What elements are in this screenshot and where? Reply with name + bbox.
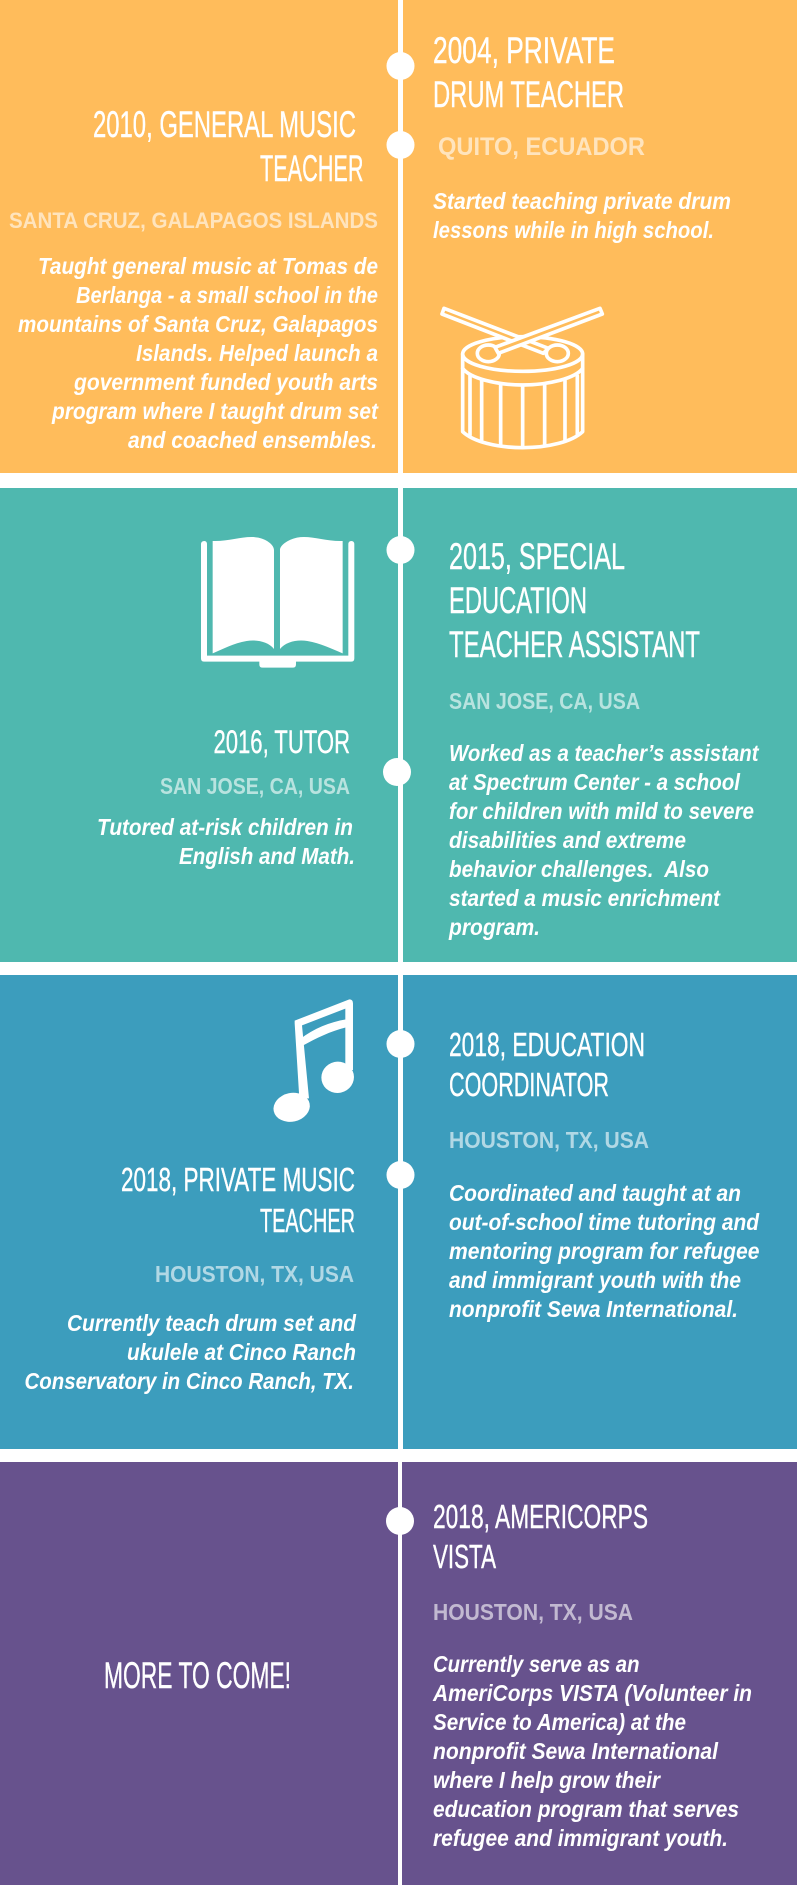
description: Tomas de Berlanga: [18, 253, 379, 453]
purple panel background: [0, 1462, 797, 1885]
timeline: vertical line with milestone dots: [383, 0, 414, 1885]
description: Spectrum Center: [448, 740, 760, 940]
teal panel background: [0, 488, 797, 962]
panel: 2004 and 2010 roles: [0, 0, 797, 473]
description: VISTA service: refugee and immigrant youth.: [433, 1825, 728, 1851]
description: VISTA service: Service to America) at the: [433, 1709, 686, 1735]
heading: 2010 general music teacher: [93, 104, 364, 189]
orange panel background: [0, 0, 797, 473]
description: Sewa International tutoring: mentoring program for refugee: [449, 1238, 760, 1264]
heading: 2004 private drum teacher: 2004, PRIVATE: [433, 30, 615, 71]
description: Sewa International tutoring: and immigrant youth with the: [449, 1267, 741, 1293]
panel: 2018 education coordinator and private music teacher: [0, 975, 797, 1449]
heading: 2010 general music teacher: 2010, GENERAL MUSIC: [93, 104, 356, 145]
description: tutoring: English and Math.: [179, 843, 355, 869]
icon: open book: [201, 537, 354, 668]
description: Spectrum Center: program.: [448, 914, 540, 940]
description: Sewa International tutoring: nonprofit Sewa International.: [449, 1296, 738, 1322]
description: VISTA service: [432, 1651, 752, 1851]
heading: 2018 AmeriCorps VISTA: 2018, AMERICORPS: [433, 1498, 648, 1535]
description: Cinco Ranch: Currently teach drum set and: [67, 1310, 357, 1336]
description: Sewa International tutoring: [449, 1180, 760, 1322]
heading: 2018 private music teacher: [121, 1161, 355, 1239]
blue panel background: [0, 975, 797, 1449]
panel: AmeriCorps VISTA and more to come: [0, 1462, 797, 1885]
description: tutoring: [97, 814, 355, 869]
location: Houston left: HOUSTON, TX, USA: [155, 1261, 354, 1287]
heading: 2010 general music teacher: TEACHER: [260, 148, 364, 189]
description: Spectrum Center: disabilities and extreme: [449, 827, 686, 853]
heading: 2018 AmeriCorps VISTA: [433, 1498, 648, 1575]
heading: 2015 special education teacher assistant: [449, 536, 700, 665]
description: Tomas de Berlanga: Islands. Helped launch a: [136, 340, 378, 366]
description: private drum lessons: Started teaching private drum: [433, 188, 731, 214]
heading: 2018 education coordinator: COORDINATOR: [449, 1066, 609, 1103]
description: private drum lessons: lessons while in high school.: [433, 217, 714, 243]
icon: drum with crossed sticks: [442, 308, 602, 448]
heading: 2018 education coordinator: 2018, EDUCATION: [449, 1026, 645, 1063]
description: VISTA service: Currently serve as an: [433, 1651, 640, 1677]
description: Spectrum Center: at Spectrum Center - a school: [449, 769, 741, 795]
heading: 2018 private music teacher: 2018, PRIVATE MUSIC: [121, 1161, 355, 1198]
description: VISTA service: where I help grow their: [433, 1767, 661, 1793]
heading: 2004 private drum teacher: [433, 30, 624, 115]
description: Cinco Ranch: Conservatory in Cinco Ranch, TX.: [24, 1368, 354, 1394]
description: Tomas de Berlanga: government funded youth arts: [73, 369, 378, 395]
description: Tomas de Berlanga: mountains of Santa Cruz, Galapagos: [18, 311, 378, 337]
description: Tomas de Berlanga: program where I taught drum set: [51, 398, 379, 424]
panel: 2015 and 2016 roles: [0, 488, 797, 962]
heading: 2015 special education teacher assistant: EDUCATION: [449, 580, 587, 621]
location: Houston purple: HOUSTON, TX, USA: [433, 1599, 633, 1625]
heading: 2018 AmeriCorps VISTA: VISTA: [433, 1538, 496, 1575]
description: Spectrum Center: started a music enrichment: [449, 885, 721, 911]
description: Tomas de Berlanga: Taught general music at Tomas de: [38, 253, 378, 279]
heading: 2018 education coordinator: [449, 1026, 645, 1103]
description: VISTA service: nonprofit Sewa International: [433, 1738, 719, 1764]
heading: 2018 private music teacher: TEACHER: [260, 1202, 355, 1239]
location: San Jose right: SAN JOSE, CA, USA: [449, 688, 640, 714]
icon: music notes: [271, 999, 357, 1125]
heading: 2015 special education teacher assistant: 2015, SPECIAL: [449, 536, 625, 577]
location: San Jose left: SAN JOSE, CA, USA: [160, 773, 350, 799]
description: Sewa International tutoring: Coordinated and taught at an: [449, 1180, 741, 1206]
heading: more to come: MORE TO COME!: [104, 1655, 291, 1696]
description: Spectrum Center: for children with mild to severe: [449, 798, 754, 824]
description: VISTA service: education program that serves: [433, 1796, 739, 1822]
description: Spectrum Center: Worked as a teacher’s assistant: [449, 740, 760, 766]
description: Tomas de Berlanga: and coached ensembles.: [128, 427, 377, 453]
description: Cinco Ranch: ukulele at Cinco Ranch: [127, 1339, 356, 1365]
description: Tomas de Berlanga: Berlanga - a small school in the: [76, 282, 378, 308]
location: Santa Cruz: SANTA CRUZ, GALAPAGOS ISLANDS: [9, 208, 378, 233]
heading: 2016 tutor: 2016, TUTOR: [214, 724, 350, 760]
description: Spectrum Center: behavior challenges. Also: [449, 856, 709, 882]
description: Cinco Ranch: [24, 1310, 357, 1394]
heading: 2004 private drum teacher: DRUM TEACHER: [433, 74, 624, 115]
description: tutoring: Tutored at-risk children in: [97, 814, 353, 840]
description: private drum lessons: [433, 188, 731, 243]
description: Sewa International tutoring: out-of-school time tutoring and: [449, 1209, 760, 1235]
location: Quito: QUITO, ECUADOR: [438, 133, 645, 161]
description: VISTA service: AmeriCorps VISTA (Volunteer in: [432, 1680, 752, 1706]
location: Houston right: HOUSTON, TX, USA: [449, 1127, 649, 1153]
